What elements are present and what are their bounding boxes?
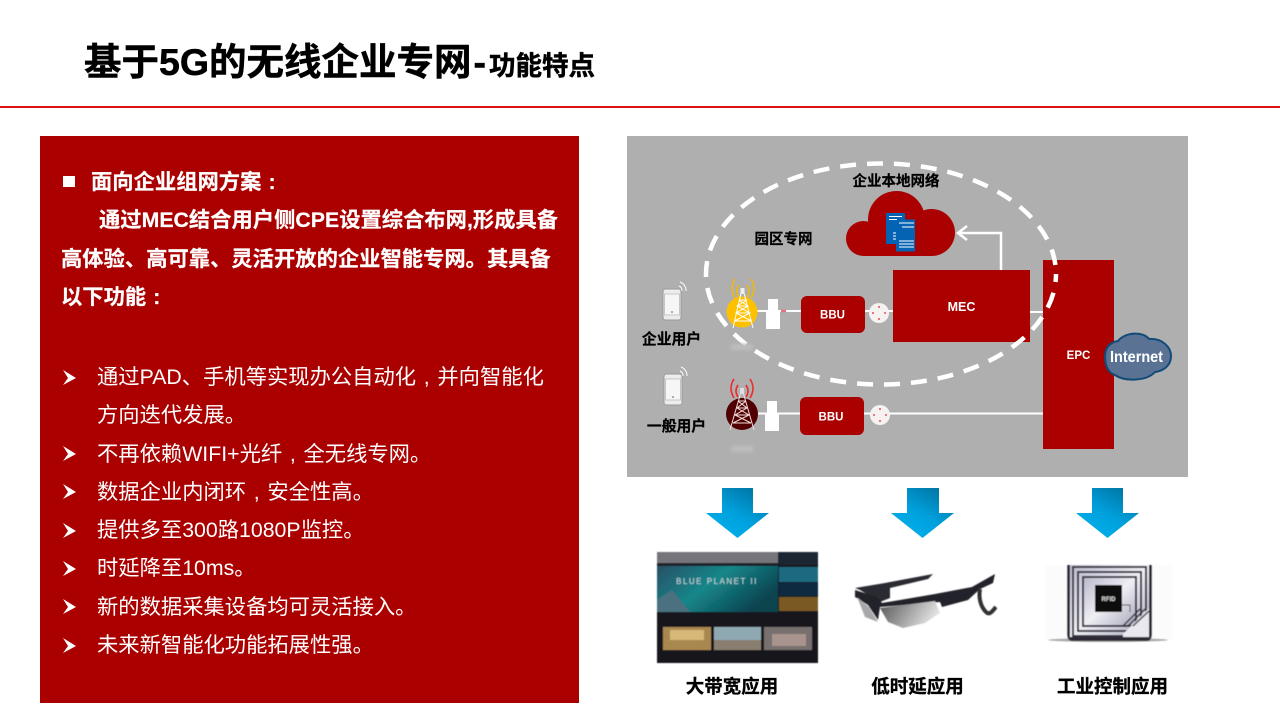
section heading: :	[268, 170, 276, 194]
enterprise local network cloud	[846, 191, 955, 256]
arrow: MEC to cloud	[958, 226, 1001, 271]
campus private network dashed boundary	[706, 164, 1056, 384]
icon: public tower	[726, 379, 758, 430]
icon: servers	[886, 213, 915, 252]
label: industrial control applications: 工业控制应用	[1057, 676, 1168, 697]
label: broadband applications: 大带宽应用	[686, 676, 778, 697]
image: RFID tag	[1046, 565, 1172, 642]
panel: enterprise networking features	[40, 136, 579, 703]
square bullet	[63, 176, 75, 187]
tower reflections	[731, 344, 753, 452]
label: general users: 一般用户	[647, 417, 706, 435]
label: low latency applications: 低时延应用	[871, 676, 964, 697]
icon: router public	[870, 405, 890, 425]
BBU enterprise: BBU	[820, 310, 845, 322]
arrow: industrial control	[1076, 488, 1139, 538]
icon: public phone	[664, 367, 687, 405]
BBU public: BBU	[819, 412, 843, 424]
image: video streaming interface	[657, 552, 818, 663]
MEC block: MEC	[948, 300, 975, 314]
intro paragraph: 以下功能	[61, 285, 146, 309]
feature list: 数据企业内闭环 安全性高。	[97, 480, 374, 504]
feature list	[63, 365, 544, 657]
feature list: 未来新智能化功能拓展性强。	[97, 633, 374, 657]
image: smart glasses	[855, 574, 996, 628]
feature list: 通过PAD、手机等实现办公自动化 并向智能化	[97, 365, 544, 389]
header rule	[0, 106, 1280, 108]
icon: enterprise phone	[663, 282, 686, 320]
arrow: broadband	[706, 488, 769, 538]
icon: enterprise tower	[726, 279, 758, 328]
icon: public antenna unit	[765, 401, 779, 431]
label: enterprise local network: 企业本地网络	[852, 172, 940, 190]
MEC block	[893, 270, 1030, 342]
feature list: 不再依赖WIFI+光纤 全无线专网。	[97, 442, 431, 466]
title: 基于5G的无线企业专网-功能特点	[84, 40, 595, 82]
feature list: ,	[254, 480, 260, 504]
intro paragraph: :	[153, 285, 160, 309]
image: video streaming interface: BLUE PLANET II	[676, 577, 758, 586]
Internet cloud: Internet	[1110, 349, 1164, 366]
feature list: 新的数据采集设备均可灵活接入。	[97, 595, 416, 619]
intro paragraph: 高体验、高可靠、灵活开放的企业智能专网。其具备	[61, 246, 551, 270]
feature list: ,	[290, 442, 296, 466]
label: campus private network: 园区专网	[754, 230, 812, 248]
diagram background	[627, 136, 1188, 477]
feature list: 方向迭代发展。	[97, 403, 246, 427]
feature list: 提供多至300路1080P监控。	[97, 518, 364, 542]
EPC block	[1043, 260, 1114, 449]
icon: router enterprise	[869, 303, 889, 323]
feature list: ,	[424, 365, 430, 389]
intro paragraph	[61, 208, 558, 309]
section heading: 面向企业组网方案	[91, 170, 261, 194]
EPC block: EPC	[1067, 350, 1090, 362]
image: RFID tag: RFID	[1102, 597, 1116, 603]
arrow: low latency	[891, 488, 954, 538]
BBU enterprise	[801, 296, 865, 333]
label: enterprise users: 企业用户	[642, 330, 701, 348]
icon: enterprise antenna unit	[751, 299, 786, 329]
connector lines	[756, 311, 1043, 414]
intro paragraph: 通过MEC结合用户侧CPE设置综合布网,形成具备	[99, 208, 558, 232]
Internet cloud	[1105, 334, 1171, 380]
BBU public	[800, 397, 864, 435]
feature list: 时延降至10ms。	[97, 556, 256, 580]
